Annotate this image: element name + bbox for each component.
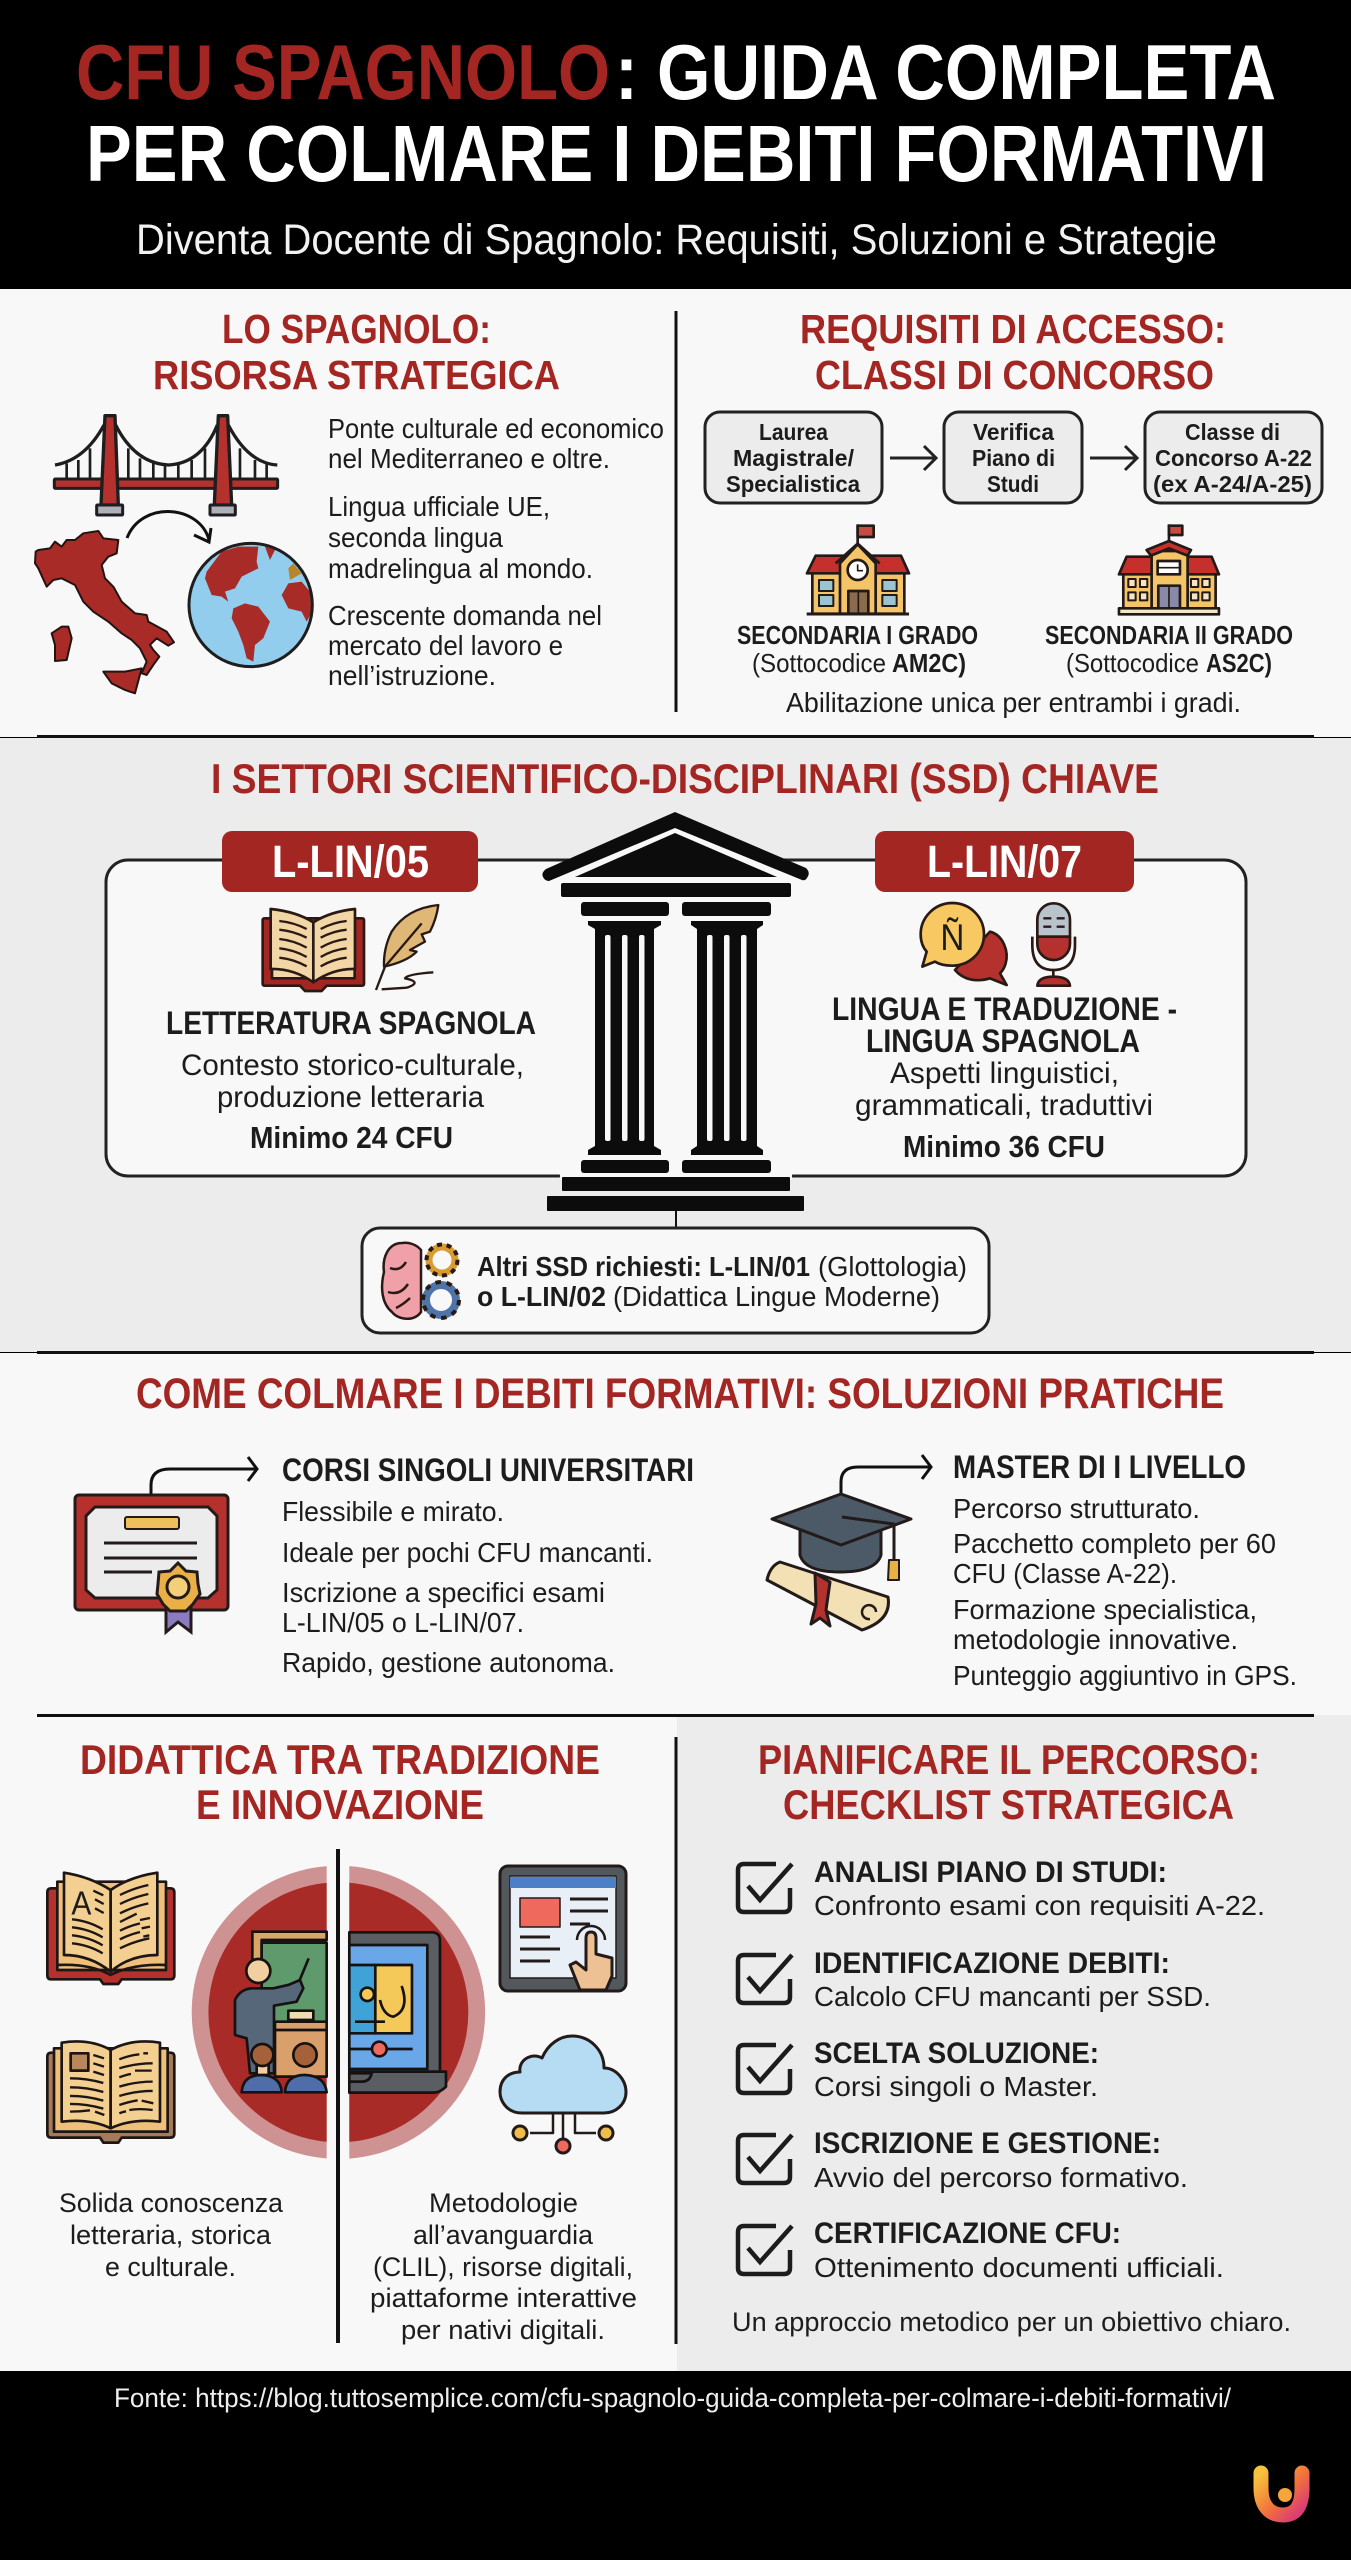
text: corsi singoli: Flessibile e mirato. bbox=[282, 1496, 504, 1527]
arrow bbox=[1090, 446, 1137, 470]
icon: certificate bbox=[75, 1495, 228, 1632]
panel: pianificare il percorso bbox=[732, 1736, 1291, 2337]
flow box: verifica: Piano di bbox=[972, 445, 1055, 471]
flow box: laurea: Magistrale/ bbox=[733, 445, 855, 471]
text: benefits of spanish bbox=[328, 413, 664, 691]
icon: open book bbox=[263, 909, 364, 991]
title bbox=[76, 28, 1276, 198]
footer bbox=[114, 2383, 1302, 2515]
text: metodologie: per nativi digitali. bbox=[401, 2315, 605, 2345]
text: corsi singoli: Iscrizione a specifici esami bbox=[282, 1577, 605, 1608]
arrow bbox=[890, 446, 936, 470]
icon: tablet bbox=[500, 1866, 626, 1991]
checklist item 4: Avvio del percorso formativo. bbox=[814, 2162, 1188, 2193]
checklist item 2: Calcolo CFU mancanti per SSD. bbox=[814, 1981, 1211, 2012]
text: metodologie: piattaforme interattive bbox=[370, 2283, 637, 2313]
source link text: Fonte: https://blog.tuttosemplice.com/cfu-spagnolo-guida-completa-per-colmare-i-debiti-formativi/ bbox=[114, 2383, 1231, 2413]
label: secondaria I grado bbox=[737, 620, 978, 678]
text: letteratura spagnola: LETTERATURA SPAGNOLA bbox=[166, 1005, 536, 1041]
heading: didattica: DIDATTICA TRA TRADIZIONE bbox=[80, 1736, 600, 1783]
text: benefits of spanish: Crescente domanda nel bbox=[328, 600, 602, 631]
checklist item 1: ANALISI PIANO DI STUDI: bbox=[814, 1856, 1167, 1889]
text: metodologie: (CLIL), risorse digitali, bbox=[373, 2252, 633, 2282]
text: letteratura spagnola: Contesto storico-culturale, bbox=[181, 1049, 524, 1082]
rule: split circle centre bbox=[336, 1849, 340, 2343]
icon: arrow from italy to globe bbox=[127, 512, 211, 542]
text: corsi singoli: CORSI SINGOLI UNIVERSITARI bbox=[282, 1452, 694, 1488]
panel: requisiti di accesso bbox=[705, 306, 1322, 718]
heading: didattica: E INNOVAZIONE bbox=[196, 1781, 484, 1828]
badge: L-LIN/07 bbox=[875, 831, 1134, 892]
flow box: classe di concorso bbox=[1145, 412, 1322, 503]
text: master: CFU (Classe A-22). bbox=[953, 1558, 1177, 1589]
icon: school II grado bbox=[1119, 524, 1219, 614]
icon: arrow from cap bbox=[841, 1455, 931, 1494]
flow box: verifica: Studi bbox=[987, 471, 1039, 497]
flow box: laurea: Laurea bbox=[759, 419, 828, 445]
text: master: Pacchetto completo per 60 bbox=[953, 1528, 1276, 1559]
text: solida conoscenza: e culturale. bbox=[105, 2252, 236, 2282]
icon: logo bbox=[1261, 2473, 1302, 2515]
checklist item 2: IDENTIFICAZIONE DEBITI: bbox=[814, 1947, 1170, 1980]
text: altri ssd richiesti: (Didattica Lingue Moderne) bbox=[613, 1281, 940, 1312]
callout: altri ssd bbox=[362, 1228, 989, 1333]
text: metodologie bbox=[370, 2188, 637, 2345]
heading: risorsa strategica: RISORSA STRATEGICA bbox=[153, 352, 560, 398]
label: secondaria II grado bbox=[1045, 620, 1293, 678]
text: closing note: Un approccio metodico per un obiettivo chiaro. bbox=[732, 2307, 1291, 2337]
text: altri ssd richiesti: Altri SSD richiesti: L-LIN/01 bbox=[477, 1251, 810, 1282]
badge: L-LIN/07: L-LIN/07 bbox=[927, 836, 1082, 887]
icon: italy map bbox=[35, 531, 174, 693]
label: secondaria II grado: (Sottocodice bbox=[1066, 648, 1199, 678]
text: altri ssd richiesti: o L-LIN/02 bbox=[477, 1281, 606, 1312]
label: secondaria II grado: SECONDARIA II GRADO bbox=[1045, 620, 1293, 650]
text: benefits of spanish: nell’istruzione. bbox=[328, 660, 496, 691]
icon: globe bbox=[189, 543, 312, 667]
icon: speech bubbles: Ñ bbox=[940, 917, 964, 958]
badge: L-LIN/05: L-LIN/05 bbox=[272, 836, 429, 887]
text: benefits of spanish: mercato del lavoro e bbox=[328, 630, 563, 661]
icon: book with picture bbox=[47, 2041, 174, 2143]
panel: didattica tra tradizione e innovazione bbox=[47, 1736, 637, 2345]
flow box: classe di concorso: Classe di bbox=[1185, 419, 1280, 445]
text: lingua e traduzione bbox=[832, 991, 1177, 1164]
icon: yellow gear bbox=[426, 1244, 458, 1276]
flow box: classe di concorso: (ex A-24/A-25) bbox=[1153, 471, 1312, 497]
text: benefits of spanish: madrelingua al mondo. bbox=[328, 553, 593, 584]
heading: ssd: I SETTORI SCIENTIFICO-DISCIPLINARI (SSD) CHIAVE bbox=[211, 755, 1159, 802]
icon: blue gear bbox=[423, 1282, 459, 1318]
text: altri ssd richiesti bbox=[477, 1251, 967, 1312]
checklist item 5: CERTIFICAZIONE CFU: bbox=[814, 2217, 1121, 2250]
title: CFU SPAGNOLO bbox=[76, 28, 610, 116]
icon: split circle tradition bbox=[192, 1866, 327, 2159]
flow box: verifica: Verifica bbox=[973, 419, 1054, 445]
text: benefits of spanish: seconda lingua bbox=[328, 522, 503, 553]
text: master: Punteggio aggiuntivo in GPS. bbox=[953, 1660, 1297, 1691]
panel: settori scientifico-disciplinari bbox=[106, 755, 1246, 1333]
text: lingua e traduzione: LINGUA E TRADUZIONE - bbox=[832, 991, 1177, 1027]
icon: central column temple bbox=[542, 812, 809, 1211]
panel: come colmare i debiti bbox=[75, 1370, 1297, 1691]
text: master: Formazione specialistica, bbox=[953, 1594, 1257, 1625]
text: master: metodologie innovative. bbox=[953, 1624, 1238, 1655]
text: lingua e traduzione: Minimo 36 CFU bbox=[903, 1129, 1105, 1164]
icon: teacher at blackboard bbox=[235, 1932, 327, 2092]
connector bbox=[675, 1211, 677, 1229]
heading: risorsa strategica: LO SPAGNOLO: bbox=[222, 306, 491, 352]
icon: diploma bbox=[767, 1562, 888, 1630]
text: benefits of spanish: nel Mediterraneo e oltre. bbox=[328, 443, 610, 474]
label: secondaria II grado: AS2C) bbox=[1206, 648, 1272, 678]
heading: didattica bbox=[80, 1736, 600, 1828]
text: corsi singoli bbox=[282, 1452, 694, 1678]
text: corsi singoli: Rapido, gestione autonoma. bbox=[282, 1647, 615, 1678]
text: lingua e traduzione: Aspetti linguistici, bbox=[890, 1057, 1119, 1090]
icon: microphone bbox=[1032, 903, 1075, 986]
text: metodologie: all’avanguardia bbox=[413, 2220, 594, 2250]
icon: school I grado bbox=[807, 524, 909, 614]
text: lingua e traduzione: LINGUA SPAGNOLA bbox=[866, 1023, 1140, 1059]
icon: cloud network bbox=[500, 2036, 626, 2153]
text: solida conoscenza: Solida conoscenza bbox=[59, 2188, 284, 2218]
text: master bbox=[953, 1449, 1297, 1691]
subtitle: Diventa Docente di Spagnolo: Requisiti, Soluzioni e Strategie bbox=[136, 216, 1217, 264]
heading: requisiti di accesso: REQUISITI DI ACCESSO: bbox=[800, 306, 1226, 352]
text: lingua e traduzione: grammaticali, traduttivi bbox=[855, 1089, 1153, 1122]
checklist item 1: Confronto esami con requisiti A-22. bbox=[814, 1890, 1265, 1921]
icon: graduation cap bbox=[772, 1494, 911, 1580]
text: letteratura spagnola bbox=[166, 1005, 536, 1155]
checklist item 4 bbox=[738, 2127, 1188, 2193]
icon: book with letter A bbox=[47, 1873, 174, 1984]
checklist item 3 bbox=[738, 2037, 1099, 2102]
text: altri ssd richiesti: (Glottologia) bbox=[818, 1251, 967, 1282]
checklist item 5 bbox=[738, 2217, 1224, 2283]
heading: checklist: PIANIFICARE IL PERCORSO: bbox=[758, 1736, 1260, 1783]
badge: L-LIN/05 bbox=[222, 831, 478, 892]
flow box: laurea: Specialistica bbox=[726, 471, 860, 497]
text: corsi singoli: Ideale per pochi CFU mancanti. bbox=[282, 1537, 653, 1568]
checklist item 5: Ottenimento documenti ufficiali. bbox=[814, 2252, 1224, 2283]
flow box: classe di concorso: Concorso A-22 bbox=[1155, 445, 1312, 471]
label: secondaria I grado: (Sottocodice bbox=[752, 648, 886, 678]
text: master: Percorso strutturato. bbox=[953, 1493, 1200, 1524]
checklist item 4: ISCRIZIONE E GESTIONE: bbox=[814, 2127, 1161, 2160]
checklist item 3: Corsi singoli o Master. bbox=[814, 2071, 1098, 2102]
icon: book with letter A: A bbox=[71, 1885, 92, 1922]
icon: arrow from certificate bbox=[151, 1457, 257, 1495]
text: solida conoscenza: letteraria, storica bbox=[70, 2220, 272, 2250]
text: letteratura spagnola: Minimo 24 CFU bbox=[250, 1120, 453, 1155]
heading: requisiti di accesso: CLASSI DI CONCORSO bbox=[815, 352, 1214, 398]
checklist item 3: SCELTA SOLUZIONE: bbox=[814, 2037, 1099, 2070]
note: abilitazione: Abilitazione unica per entrambi i gradi. bbox=[786, 687, 1241, 718]
header bbox=[76, 28, 1276, 264]
checklist item 1 bbox=[738, 1856, 1265, 1921]
text: benefits of spanish: Lingua ufficiale UE, bbox=[328, 491, 550, 522]
heading: requisiti di accesso bbox=[800, 306, 1226, 398]
icon: brain bbox=[382, 1243, 421, 1319]
panel: lo spagnolo risorsa strategica bbox=[35, 306, 664, 693]
icon: bridge bbox=[54, 416, 278, 515]
text: letteratura spagnola: produzione letteraria bbox=[217, 1081, 484, 1114]
icon: laptop with puzzle bbox=[349, 1932, 446, 2093]
label: secondaria I grado: AM2C) bbox=[892, 648, 966, 678]
checklist item 2 bbox=[738, 1947, 1211, 2012]
heading: risorsa strategica bbox=[153, 306, 560, 398]
text: benefits of spanish: Ponte culturale ed economico bbox=[328, 413, 664, 444]
label: secondaria I grado: SECONDARIA I GRADO bbox=[737, 620, 978, 650]
title: : GUIDA COMPLETA bbox=[615, 28, 1276, 116]
heading: checklist: CHECKLIST STRATEGICA bbox=[783, 1781, 1234, 1828]
heading: checklist bbox=[758, 1736, 1260, 1828]
flow box: verifica bbox=[944, 412, 1082, 503]
text: master: MASTER DI I LIVELLO bbox=[953, 1449, 1246, 1485]
icon: speech bubbles bbox=[921, 903, 1007, 985]
text: corsi singoli: L-LIN/05 o L-LIN/07. bbox=[282, 1607, 524, 1638]
card: ssd container bbox=[106, 860, 1246, 1176]
text: solida conoscenza bbox=[59, 2188, 284, 2282]
icon: split circle innovation bbox=[349, 1866, 485, 2159]
icon: feather quill bbox=[376, 905, 438, 990]
flow box: laurea bbox=[705, 412, 882, 503]
text: metodologie: Metodologie bbox=[429, 2188, 578, 2218]
